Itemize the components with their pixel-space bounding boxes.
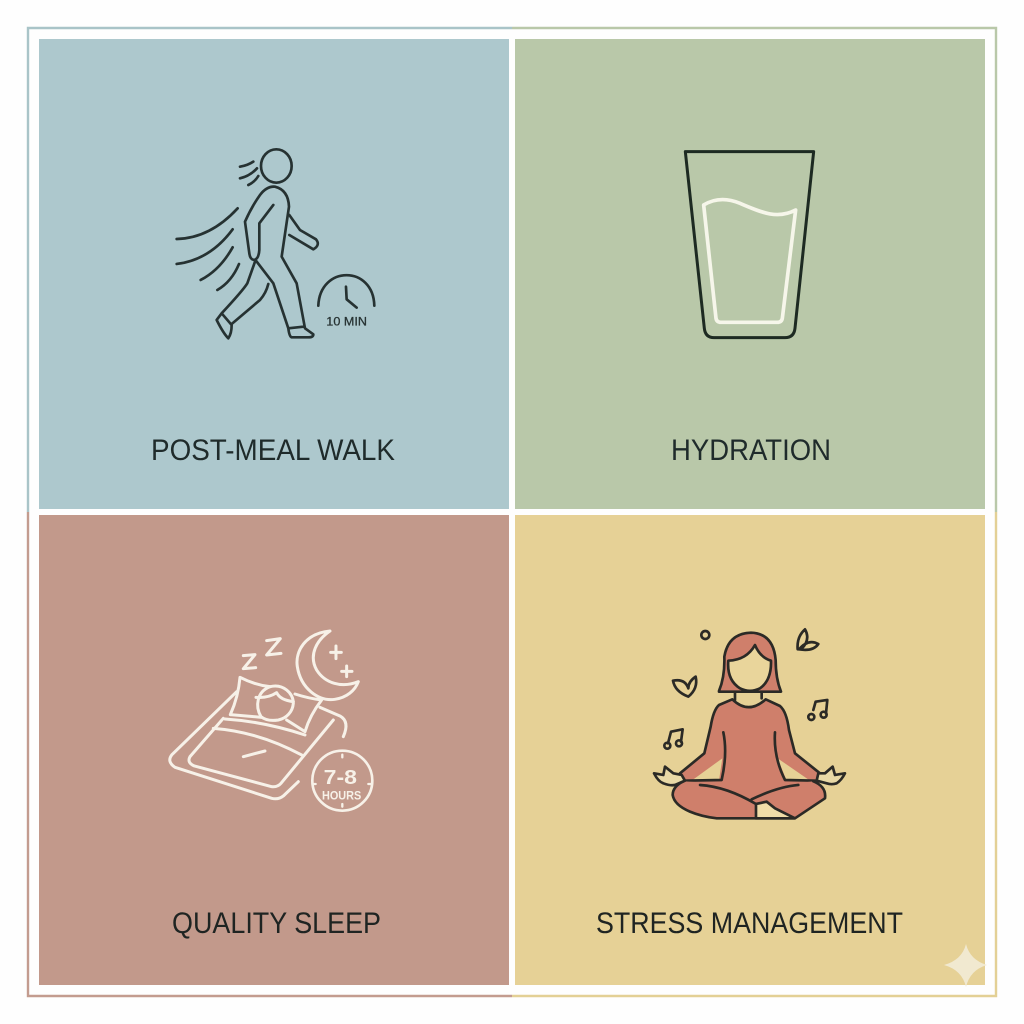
decorative sparkle <box>944 944 987 987</box>
panel: quality sleep <box>39 515 509 985</box>
icon: glass of water <box>685 152 814 338</box>
icon: sleeping person in bed with moon and clock <box>170 631 372 811</box>
torso and arms <box>680 699 820 802</box>
hands <box>654 767 685 785</box>
label: hydration: HYDRATION <box>671 434 831 467</box>
text: 7-8 hours: 7-8 <box>324 767 357 789</box>
legs <box>673 781 825 818</box>
label: quality sleep: QUALITY SLEEP <box>172 907 381 940</box>
panel: hydration <box>515 39 985 509</box>
panel: post-meal walk <box>39 39 509 509</box>
panel: stress management <box>515 515 985 985</box>
icon: meditating woman <box>654 629 845 818</box>
label: post-meal walk: POST-MEAL WALK <box>151 434 395 467</box>
icon: walking person with clock <box>177 149 374 338</box>
text: 7-8 hours <box>322 767 361 802</box>
text: 10 min: 10 MIN <box>326 315 367 329</box>
text: 7-8 hours: HOURS <box>322 788 361 802</box>
label: stress management: STRESS MANAGEMENT <box>596 907 903 940</box>
